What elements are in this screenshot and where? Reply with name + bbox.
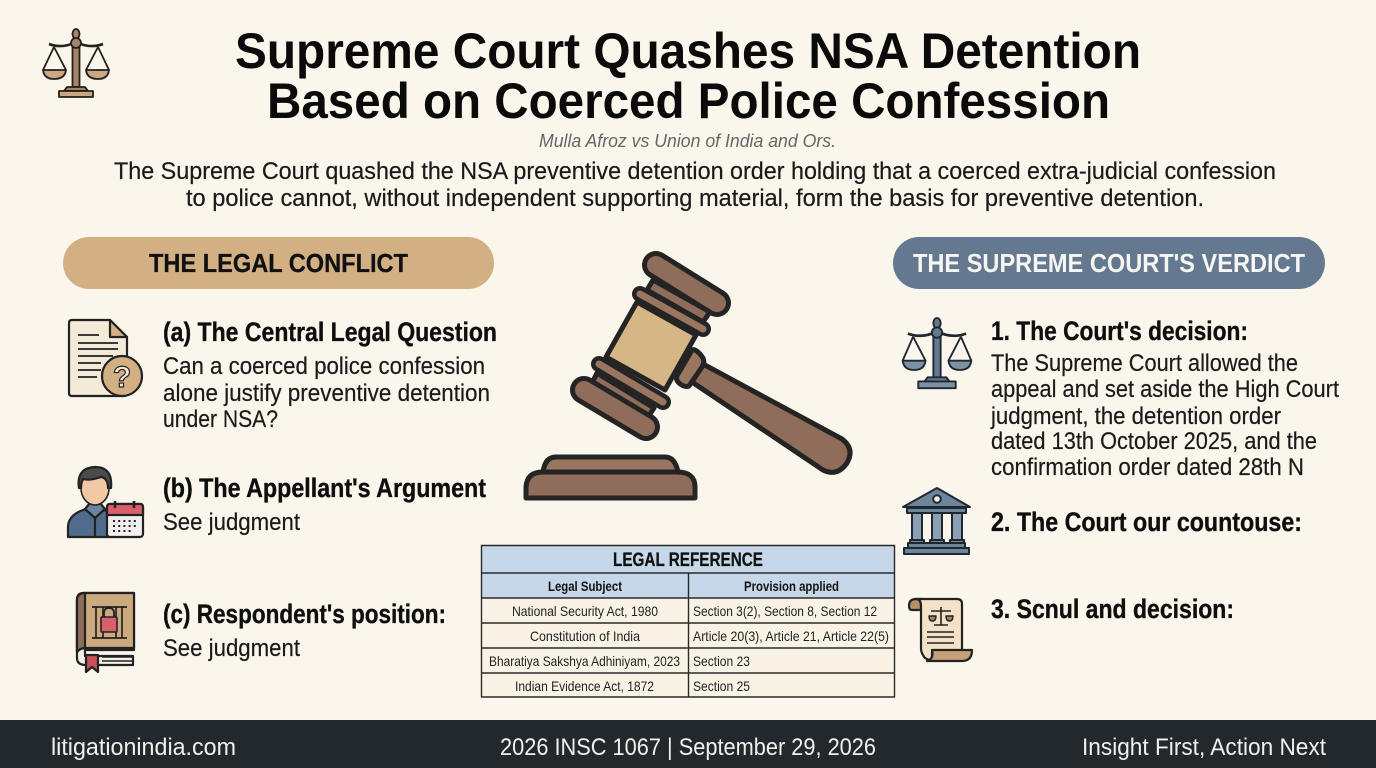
table: legal reference — [482, 545, 894, 697]
text block: respondent's position: (c) Respondent's position: — [163, 599, 446, 629]
text block: the court's decision: The Supreme Court allowed the — [991, 350, 1298, 377]
icon: gavel and sound block — [526, 265, 850, 498]
heading: verdict pill — [893, 237, 1325, 289]
table rows: Bharatiya Sakshya Adhiniyam, 2023 — [489, 653, 680, 669]
text block: appellant's argument: See judgment — [163, 509, 300, 536]
text block: respondent's position: See judgment — [163, 635, 300, 662]
table header band — [482, 545, 894, 598]
panel: the legal conflict — [63, 237, 497, 672]
summary text: to police cannot, without independent supporting material, form the basis for preventive detention. — [186, 185, 1204, 212]
footer bar — [0, 720, 1376, 768]
icon: scroll with scales — [909, 599, 972, 661]
text block: appellant's argument — [163, 473, 486, 536]
heading: the legal conflict pill — [63, 237, 494, 289]
summary text: The Supreme Court quashed the NSA preventive detention order holding that a coerced extra-judicial confession — [114, 158, 1276, 185]
gavel head — [584, 265, 717, 427]
heading: the court our countouse: 2. The Court our countouse: — [991, 507, 1302, 537]
text block: the court's decision: appeal and set aside the High Court — [991, 376, 1339, 403]
table column headings: Legal Subject — [548, 578, 622, 594]
icon: law book with padlock behind bars — [77, 593, 134, 672]
panel: the supreme court's verdict — [893, 237, 1339, 661]
table rows: National Security Act, 1980 — [512, 603, 658, 619]
icon: document with question mark: ? — [113, 361, 131, 394]
text block: the court's decision: dated 13th October 2025, and the — [991, 428, 1317, 455]
footer: citation and date: 2026 INSC 1067 | September 29, 2026 — [500, 734, 876, 761]
title: Supreme Court Quashes NSA Detention — [235, 23, 1141, 79]
sound block — [526, 457, 695, 498]
table rows: Article 20(3), Article 21, Article 22(5) — [693, 628, 889, 644]
table title: LEGAL REFERENCE — [613, 550, 763, 571]
text block: appellant's argument: (b) The Appellant's Argument — [163, 473, 486, 503]
table column headings: Provision applied — [744, 578, 839, 594]
gavel handle collar — [676, 350, 704, 386]
text block: central legal question: (a) The Central Legal Question — [163, 317, 497, 347]
table rows: Section 23 — [693, 653, 750, 669]
table rows: Indian Evidence Act, 1872 — [515, 678, 654, 694]
text block: the court's decision — [990, 316, 1339, 481]
title — [235, 23, 1141, 129]
gavel handle — [692, 364, 850, 472]
footer: tagline: Insight First, Action Next — [1082, 734, 1326, 761]
heading: scnul and decision: 3. Scnul and decision: — [991, 594, 1234, 624]
text block: central legal question: Can a coerced police confession — [163, 353, 485, 380]
heading: verdict pill: THE SUPREME COURT'S VERDICT — [913, 248, 1305, 278]
text block: the court's decision: confirmation order dated 28th N — [991, 454, 1304, 481]
text block: central legal question: under NSA? — [163, 406, 278, 433]
text block: the court's decision: judgment, the detention order — [990, 403, 1281, 430]
table rows — [489, 603, 889, 694]
table column headings — [548, 578, 839, 594]
title: Based on Coerced Police Confession — [267, 73, 1110, 129]
table rows: Section 3(2), Section 8, Section 12 — [693, 603, 877, 619]
footer: website: litigationindia.com — [51, 734, 236, 761]
icon: header scales of justice — [43, 29, 109, 97]
text block: central legal question — [163, 317, 497, 433]
text block: the court's decision: 1. The Court's decision: — [991, 316, 1248, 346]
table grid — [482, 546, 894, 697]
summary text — [114, 158, 1276, 212]
table body — [482, 598, 894, 697]
text block: central legal question: alone justify preventive detention — [163, 380, 490, 407]
text block: respondent's position — [163, 599, 446, 662]
table rows: Constitution of India — [530, 628, 640, 644]
icon: document with question mark — [69, 320, 142, 396]
subtitle: case name: Mulla Afroz vs Union of India and Ors. — [539, 131, 836, 151]
icon: courthouse — [903, 488, 970, 554]
table rows: Section 25 — [693, 678, 750, 694]
heading: the legal conflict pill: THE LEGAL CONFLICT — [149, 248, 408, 278]
icon: person with calendar — [68, 467, 143, 537]
icon: verdict scales of justice — [903, 318, 971, 388]
